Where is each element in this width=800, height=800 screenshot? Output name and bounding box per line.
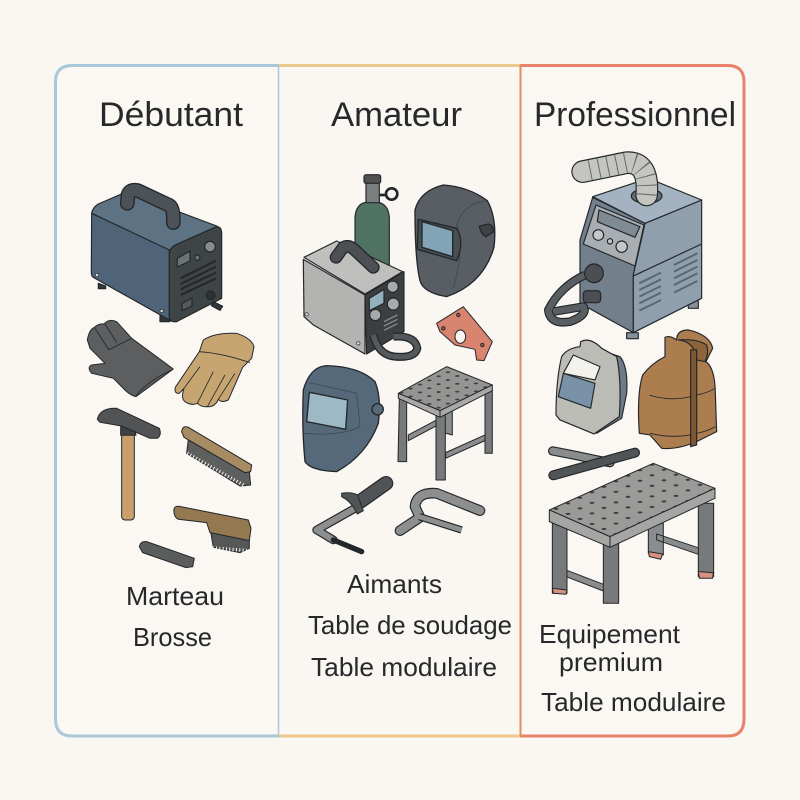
icon: welding helmet blue xyxy=(303,366,383,472)
icon: fume extractor xyxy=(548,163,702,339)
icon: grey respirator helmet xyxy=(556,340,627,434)
heading: Professionnel: Professionnel xyxy=(534,96,736,134)
icon: hand brush xyxy=(174,506,251,553)
icon: modular welding table xyxy=(549,463,715,603)
heading: Débutant: Débutant xyxy=(99,96,244,134)
icon: dark glove xyxy=(87,320,173,397)
icon: tan glove xyxy=(175,333,254,407)
icon: chalk stick xyxy=(139,541,194,568)
icon: welding helmet dark xyxy=(415,185,495,297)
heading: Amateur: Amateur xyxy=(331,96,462,134)
label: Table modulaire: Table modulaire xyxy=(541,687,726,717)
label: Table de soudage: Table de soudage xyxy=(308,610,512,640)
label: Aimants: Aimants xyxy=(347,569,442,599)
icon: gas cylinder xyxy=(355,175,397,268)
icon: compact welding machine xyxy=(91,190,223,322)
icon: silver welding machine xyxy=(303,241,417,357)
icon: MIG torch xyxy=(317,483,386,552)
icon: wire brush xyxy=(182,427,252,486)
icon: leather jacket xyxy=(639,330,717,449)
label: Table modulaire: Table modulaire xyxy=(311,652,497,682)
icon: C clamp xyxy=(400,493,480,531)
icon: welding pliers xyxy=(553,451,635,475)
icon: small welding table xyxy=(398,367,492,480)
panel: amateur xyxy=(279,66,520,736)
icon: chipping hammer xyxy=(97,408,160,520)
label: Marteau: Marteau xyxy=(126,581,224,611)
panel: débutant xyxy=(56,65,279,736)
label: Equipement: Equipement xyxy=(539,619,681,649)
icon: welding magnet xyxy=(437,307,492,361)
panel: professionnel xyxy=(520,65,744,736)
label: Brosse: Brosse xyxy=(133,622,212,652)
label: premium: premium xyxy=(559,647,663,677)
